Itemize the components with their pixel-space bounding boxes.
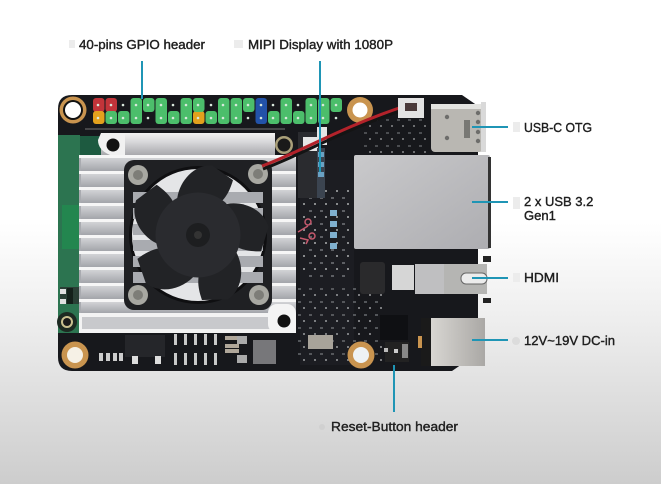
label: 40-pins GPIO header: 40-pins GPIO header [79,37,206,52]
label: 2 x USB 3.2 Gen1: Gen1 [524,208,556,223]
pink logo mark [298,219,315,244]
label: Reset-Button header: Reset-Button header [331,419,459,434]
MIPI display connector [298,127,337,249]
faint label icons [69,40,520,430]
bottom edge components [99,315,408,365]
mounting holes [60,96,374,368]
circuit board [58,95,478,371]
label: HDMI: HDMI [524,270,559,285]
USB 3.2 port [354,155,491,249]
HDMI port [360,256,491,303]
fan cable [262,98,424,169]
label: 2 x USB 3.2 Gen1: 2 x USB 3.2 [524,194,593,209]
label: USB-C OTG: USB-C OTG [524,120,592,135]
heatsink [79,133,296,333]
green antenna board [57,135,102,333]
reset-button header [384,342,409,362]
USB-C OTG port [431,102,486,152]
cooling fan [124,160,278,313]
callout lines [142,61,508,412]
label: MIPI Display with 1080P: MIPI Display with 1080P [248,37,393,52]
label: 12V~19V DC-in: 12V~19V DC-in [524,333,615,348]
DC-in jack [418,318,485,366]
GPIO header pins [93,98,342,124]
